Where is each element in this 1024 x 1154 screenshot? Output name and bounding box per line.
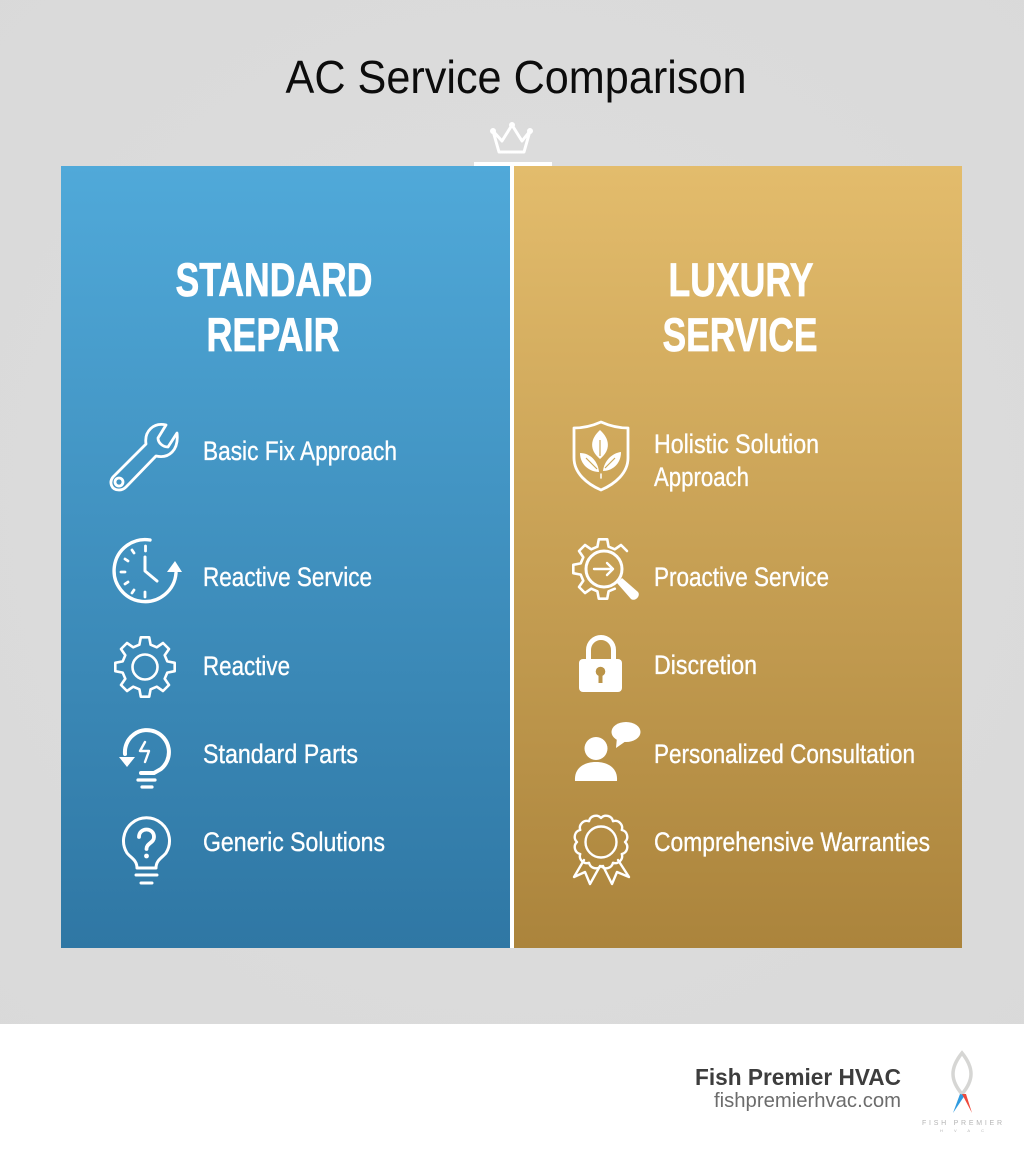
footer: brand text: Fish Premier HVAC [695,1064,901,1090]
heading: luxury service [662,253,818,361]
item: comprehensive warranties [574,816,930,884]
divider [510,166,514,948]
icon: gear [115,637,175,697]
panel: luxury service [514,166,962,948]
icon: crown [474,122,552,166]
heading: standard repair: STANDARD [176,253,372,306]
item: standard parts: Standard Parts [203,739,358,769]
item: generic solutions: Generic Solutions [203,827,385,857]
item: proactive service [573,539,829,600]
item: reactive service [114,540,372,602]
icon: shield with leaves [574,422,628,490]
item: holistic solution approach: Approach [654,462,749,492]
item: proactive service: Proactive Service [654,562,829,592]
item: holistic solution approach: Holistic Solution [654,429,819,459]
item: discretion: Discretion [654,650,757,680]
heading: standard repair [176,253,372,361]
item: reactive service: Reactive Service [203,562,372,592]
icon: padlock [579,638,622,692]
icon: clock with arrow [114,540,182,602]
item: basic fix approach [111,424,397,490]
item: reactive: Reactive [203,651,290,681]
item: comprehensive warranties: Comprehensive Warranties [654,827,930,857]
heading: luxury service: LUXURY [668,253,814,306]
title: AC Service Comparison [286,51,746,103]
panel: standard repair [61,166,510,948]
item: personalized consultation [575,722,915,781]
icon: bulb with lightning [119,730,169,787]
heading: standard repair: REPAIR [206,308,340,361]
footer: logo: HVAC [940,1128,984,1133]
footer: logo [922,1053,1002,1133]
icon: person with speech bubble [575,722,640,781]
footer: brand text [695,1064,901,1112]
icon: gear with magnifier [573,539,639,600]
item: standard parts [119,730,358,787]
footer: brand text: fishpremierhvac.com [714,1090,901,1112]
item: generic solutions [124,818,385,883]
heading: luxury service: SERVICE [662,308,818,361]
item: basic fix approach: Basic Fix Approach [203,436,397,466]
icon: wrench [111,424,177,490]
item: discretion [579,638,757,692]
footer: logo: FISH PREMIER [922,1120,1002,1127]
item: holistic solution approach [574,422,819,492]
icon: award ribbon [574,816,629,884]
item: reactive [115,637,290,697]
item: personalized consultation: Personalized Consultation [654,739,915,769]
icon: bulb with question mark [124,818,170,883]
